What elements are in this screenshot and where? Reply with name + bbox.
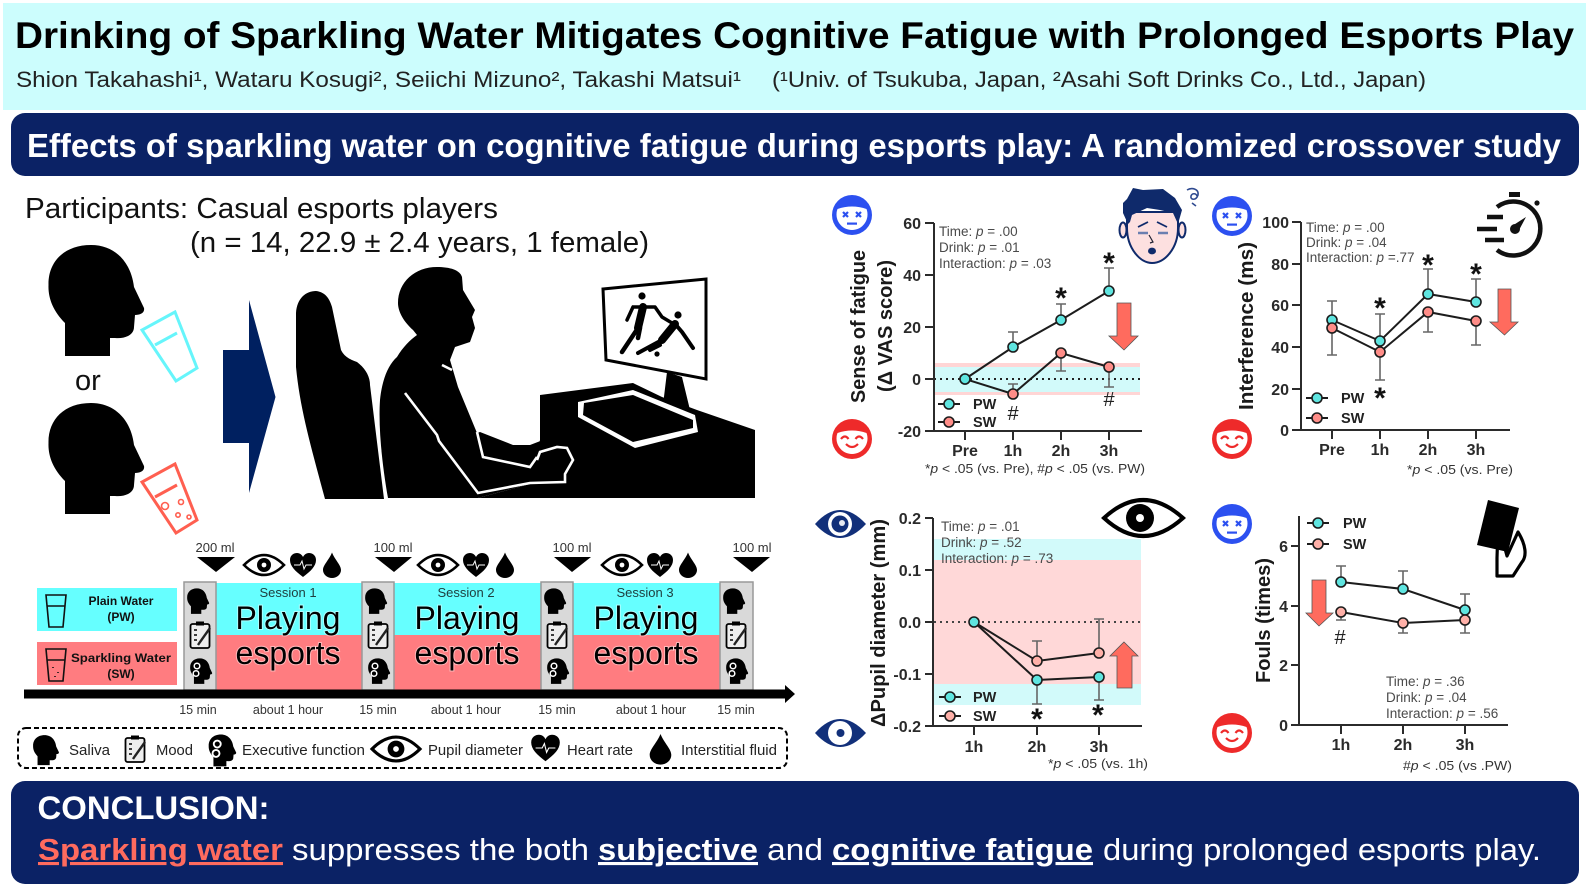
authors: Shion Takahashi¹, Wataru Kosugi², Seiichi Mizuno², Takashi Matsui¹ xyxy=(16,67,741,92)
axes xyxy=(925,223,1142,440)
significance marks: # xyxy=(1103,389,1115,411)
tick labels: 40 xyxy=(1271,340,1289,357)
error bars xyxy=(1327,269,1481,380)
error bars xyxy=(1008,268,1114,394)
axes xyxy=(1291,516,1508,734)
drink volumes: 100 ml xyxy=(373,540,413,555)
measures legend: Interstitial fluid xyxy=(681,743,777,759)
statistics: Interaction: p = .56 xyxy=(1386,706,1498,721)
session 2 block: Playing xyxy=(415,600,519,636)
tick labels: 6 xyxy=(1279,539,1288,556)
study heading band: Effects of sparkling water on cognitive fatigue during esports play: A randomized crossover study xyxy=(27,127,1562,164)
error bars xyxy=(1336,566,1470,633)
tick labels: 2h xyxy=(1028,739,1046,756)
y axis title: Interference (ms) xyxy=(1236,242,1258,410)
illustration: player at desk xyxy=(296,267,755,499)
participants text: (n = 14, 22.9 ± 2.4 years, 1 female) xyxy=(190,227,649,259)
legend: SW xyxy=(973,709,997,725)
y axis title: Sense of fatigue xyxy=(848,250,870,403)
tick labels: 60 xyxy=(1271,298,1289,315)
test block 1 xyxy=(184,582,216,690)
series: PW xyxy=(1336,577,1470,615)
legend xyxy=(938,397,997,431)
reference band xyxy=(934,539,1141,705)
tick labels: 3h xyxy=(1456,737,1474,754)
tick labels: 100 xyxy=(1262,215,1289,232)
legend: SW xyxy=(973,415,997,431)
statistics: Drink: p = .04 xyxy=(1386,690,1467,705)
timeline xyxy=(24,540,795,717)
significance marks: * xyxy=(1374,292,1386,325)
conclusion statement: suppresses the both xyxy=(292,832,589,867)
legend xyxy=(1307,516,1367,553)
icon: executive function xyxy=(209,734,236,766)
session 1 block: Playing xyxy=(236,600,340,636)
title: Drinking of Sparkling Water Mitigates Cognitive Fatigue with Prolonged Esports Play xyxy=(15,15,1574,56)
icon: saliva xyxy=(33,735,59,765)
tick labels: 20 xyxy=(1271,382,1289,399)
legend xyxy=(1306,391,1365,427)
durations: about 1 hour xyxy=(431,703,501,717)
statistics: Interaction: p =.77 xyxy=(1306,250,1414,265)
icon: mood xyxy=(126,736,145,762)
measures legend xyxy=(18,728,787,768)
tick labels: 60 xyxy=(903,216,921,233)
icon: blue tired face 2 xyxy=(1212,196,1252,236)
measures legend: Pupil diameter xyxy=(428,743,523,759)
legend: PW xyxy=(973,397,997,413)
tick labels: 3h xyxy=(1100,443,1118,460)
tick labels: 4 xyxy=(1279,599,1288,616)
durations: 15 min xyxy=(359,703,397,717)
session 2 block: Session 2 xyxy=(437,585,495,600)
statistics: Drink: p = .52 xyxy=(941,535,1022,550)
footnote: *p < .05 (vs. 1h) xyxy=(1048,756,1148,771)
series: SW xyxy=(960,348,1114,399)
significance marks: * xyxy=(1103,247,1115,280)
arrow: decrease xyxy=(1109,303,1138,350)
statistics xyxy=(1306,220,1414,265)
axes xyxy=(1292,222,1510,439)
title banner xyxy=(3,3,1586,110)
durations: about 1 hour xyxy=(253,703,323,717)
study heading band xyxy=(11,113,1579,176)
icon: red happy face 2 xyxy=(1212,419,1252,459)
tick labels: 2h xyxy=(1394,737,1412,754)
session 3 block: esports xyxy=(594,635,698,671)
icon: head drinking plain water xyxy=(48,245,197,381)
y axis title: ΔPupil diameter (mm) xyxy=(868,519,890,727)
measures legend: Mood xyxy=(156,743,193,759)
chart: fouls xyxy=(1253,516,1512,773)
statistics: Time: p = .01 xyxy=(941,519,1020,534)
affiliations: (¹Univ. of Tsukuba, Japan, ²Asahi Soft Drinks Co., Ltd., Japan) xyxy=(772,67,1426,92)
participants text: Participants: Casual esports players xyxy=(25,193,498,225)
tick labels: 1h xyxy=(1004,443,1022,460)
conclusion statement xyxy=(38,832,1541,867)
tick labels xyxy=(1279,539,1474,754)
legend: plain water xyxy=(37,588,177,631)
tick labels: -0.1 xyxy=(893,667,921,684)
y axis title: (Δ VAS score) xyxy=(875,260,897,392)
conclusion label: CONCLUSION: xyxy=(38,790,270,826)
statistics xyxy=(1386,674,1498,721)
significance marks xyxy=(1374,249,1482,415)
tick labels: 2 xyxy=(1279,658,1288,675)
participants text xyxy=(25,193,649,259)
tick labels: 1h xyxy=(1332,737,1350,754)
tick labels: 3h xyxy=(1467,442,1485,459)
statistics: Drink: p = .01 xyxy=(939,240,1020,255)
legend: sparkling water: (SW) xyxy=(107,667,135,681)
tick labels xyxy=(893,511,1108,756)
icon: blue tired face 1 xyxy=(832,195,872,235)
reference band xyxy=(934,363,1140,395)
significance marks: # xyxy=(1007,403,1019,425)
measures during session 3 xyxy=(602,552,697,578)
statistics: Time: p = .36 xyxy=(1386,674,1465,689)
significance marks: * xyxy=(1092,699,1104,732)
icon: stopwatch xyxy=(1477,192,1540,256)
chart: sense of fatigue xyxy=(848,216,1145,476)
conclusion statement: cognitive fatigue xyxy=(832,832,1093,867)
significance marks xyxy=(1031,699,1104,736)
y axis title: Fouls (times) xyxy=(1253,558,1275,683)
durations xyxy=(179,703,755,717)
tick labels: -0.2 xyxy=(893,719,921,736)
error bars xyxy=(1032,619,1104,704)
icon: foul card in hand xyxy=(1477,500,1525,576)
durations: 15 min xyxy=(717,703,755,717)
footnote: *p < .05 (vs. Pre) xyxy=(1407,462,1513,477)
legend xyxy=(939,690,997,725)
session 2 block: esports xyxy=(415,635,519,671)
session 3 block xyxy=(573,583,720,690)
y axis title xyxy=(848,250,897,403)
tick labels: 0.0 xyxy=(899,615,921,632)
icon: head drinking sparkling water xyxy=(48,403,197,533)
tick labels: 1h xyxy=(1371,442,1389,459)
desk xyxy=(478,383,755,498)
durations: 15 min xyxy=(538,703,576,717)
chart: interference xyxy=(1236,215,1518,477)
legend: SW xyxy=(1343,537,1367,553)
significance marks: * xyxy=(1422,249,1434,282)
conclusion statement: subjective xyxy=(598,832,758,867)
monitor stand xyxy=(663,372,697,425)
legend: PW xyxy=(1343,516,1367,532)
tick labels: 0.2 xyxy=(899,511,921,528)
footnote: #p < .05 (vs .PW) xyxy=(1403,758,1512,773)
arrow: increase xyxy=(1110,642,1138,688)
significance mark: # xyxy=(1334,627,1346,649)
test block 2 xyxy=(362,582,394,690)
tick labels: 1h xyxy=(965,739,983,756)
drink volumes: 100 ml xyxy=(552,540,592,555)
icon: red happy face 3 xyxy=(1212,713,1252,753)
significance marks: * xyxy=(1031,703,1043,736)
icon: fatigued face xyxy=(1120,188,1198,263)
arrow: time axis xyxy=(24,685,795,703)
icon: dilated pupil eye xyxy=(815,510,866,538)
session 3 block: Session 3 xyxy=(616,585,674,600)
session 1 block: Session 1 xyxy=(259,585,317,600)
session 1 block: esports xyxy=(236,635,340,671)
or label: or xyxy=(75,365,101,397)
test block 4 xyxy=(720,582,753,690)
gaming chair xyxy=(296,291,384,499)
measures during session 2 xyxy=(418,552,514,578)
significance marks xyxy=(1007,247,1115,425)
tick labels xyxy=(898,216,1118,460)
footnote: *p < .05 (vs. Pre), # p < .05 (vs. PW) xyxy=(925,461,1145,476)
legend: PW xyxy=(973,690,997,706)
tick labels: 20 xyxy=(903,320,921,337)
session 3 block: Playing xyxy=(594,600,698,636)
drink volumes xyxy=(195,540,772,572)
icon: red happy face 1 xyxy=(832,419,872,459)
chart: pupil diameter xyxy=(868,511,1148,771)
conclusion statement: and xyxy=(767,832,823,867)
series: PW xyxy=(974,622,1104,685)
statistics: Interaction: p = .03 xyxy=(939,256,1051,271)
statistics xyxy=(939,224,1051,271)
tick labels: 40 xyxy=(903,268,921,285)
drink volumes: 100 ml xyxy=(732,540,772,555)
keyboard xyxy=(578,390,698,448)
legend: PW xyxy=(1341,391,1365,407)
session 1 block xyxy=(216,583,362,690)
legend: sparkling water: Sparkling Water xyxy=(71,651,171,665)
tick labels: -20 xyxy=(898,424,921,441)
tick labels: 0.1 xyxy=(899,563,921,580)
icon: heart rate xyxy=(531,735,560,761)
significance marks: * xyxy=(1374,382,1386,415)
conclusion statement: during prolonged esports play. xyxy=(1103,832,1541,867)
tick labels: 2h xyxy=(1052,443,1070,460)
session 2 block xyxy=(394,583,541,690)
tick labels: 0 xyxy=(912,372,921,389)
measures legend: Heart rate xyxy=(567,743,633,759)
legend: SW xyxy=(1341,411,1365,427)
tick labels: 0 xyxy=(1280,423,1289,440)
series: PW xyxy=(960,286,1114,384)
conclusion band xyxy=(11,781,1579,884)
drink volumes: 200 ml xyxy=(195,540,235,555)
arrow: decrease xyxy=(1490,289,1518,335)
legend: plain water: Plain Water xyxy=(89,594,154,608)
soccer players on screen xyxy=(622,292,693,357)
statistics: Drink: p = .04 xyxy=(1306,235,1387,250)
tick labels xyxy=(1262,215,1485,459)
measures legend: Saliva xyxy=(69,743,111,759)
icon: large eye xyxy=(1104,500,1183,536)
icon: constricted pupil eye xyxy=(815,719,866,747)
monitor xyxy=(603,279,706,379)
legend: plain water: (PW) xyxy=(107,610,135,624)
tick labels: 2h xyxy=(1419,442,1437,459)
arrow: drinking leads to play xyxy=(223,300,276,493)
statistics: Time: p = .00 xyxy=(1306,220,1385,235)
conclusion statement: Sparkling water xyxy=(38,832,283,867)
series: SW xyxy=(1336,607,1470,628)
measures legend: Executive function xyxy=(242,743,365,759)
tick labels: 0 xyxy=(1279,718,1288,735)
statistics xyxy=(941,519,1053,566)
significance marks: * xyxy=(1055,282,1067,315)
statistics: Interaction: p = .73 xyxy=(941,551,1053,566)
tick labels: 3h xyxy=(1090,739,1108,756)
series: PW xyxy=(1327,289,1481,346)
test block 3 xyxy=(541,582,573,690)
tick labels: Pre xyxy=(952,443,978,460)
axes xyxy=(925,518,1142,735)
arrow: decrease xyxy=(1306,580,1333,626)
player silhouette xyxy=(380,267,573,498)
tick labels: 80 xyxy=(1271,257,1289,274)
durations: 15 min xyxy=(179,703,217,717)
statistics: Time: p = .00 xyxy=(939,224,1018,239)
icon: pupil diameter xyxy=(372,737,420,761)
significance marks: * xyxy=(1470,258,1482,291)
durations: about 1 hour xyxy=(616,703,686,717)
series: SW xyxy=(1327,307,1481,357)
tick labels: Pre xyxy=(1319,442,1345,459)
legend: sparkling water xyxy=(37,642,177,685)
series: SW xyxy=(969,617,1104,666)
icon: blue tired face 3 xyxy=(1212,504,1252,544)
icon: interstitial fluid xyxy=(650,734,671,765)
measures during session 1 xyxy=(244,552,341,578)
